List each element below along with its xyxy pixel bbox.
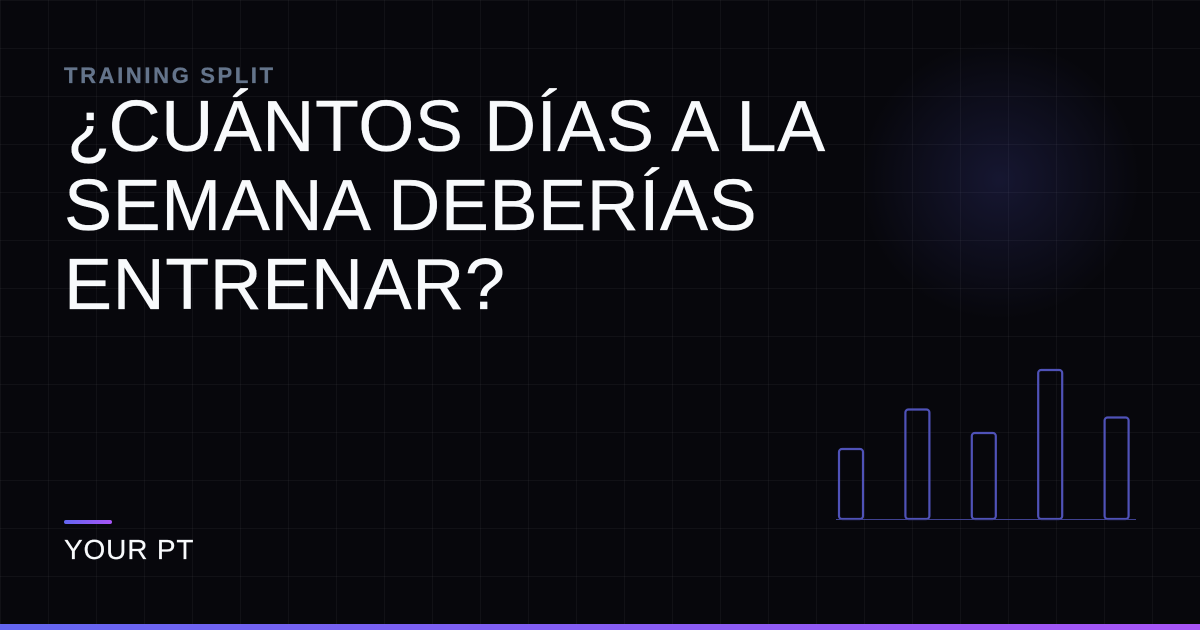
title: SEMANA DEBERÍAS xyxy=(64,166,757,246)
bottom gradient bar xyxy=(0,624,1200,630)
title xyxy=(64,87,826,325)
accent line xyxy=(64,520,112,524)
glow: soft radial background xyxy=(860,40,1140,320)
brand name: YOUR PT xyxy=(64,534,194,565)
eyebrow label: TRAINING SPLIT xyxy=(64,63,276,88)
title: ¿CUÁNTOS DÍAS A LA xyxy=(67,87,826,167)
title: ENTRENAR? xyxy=(64,245,505,325)
